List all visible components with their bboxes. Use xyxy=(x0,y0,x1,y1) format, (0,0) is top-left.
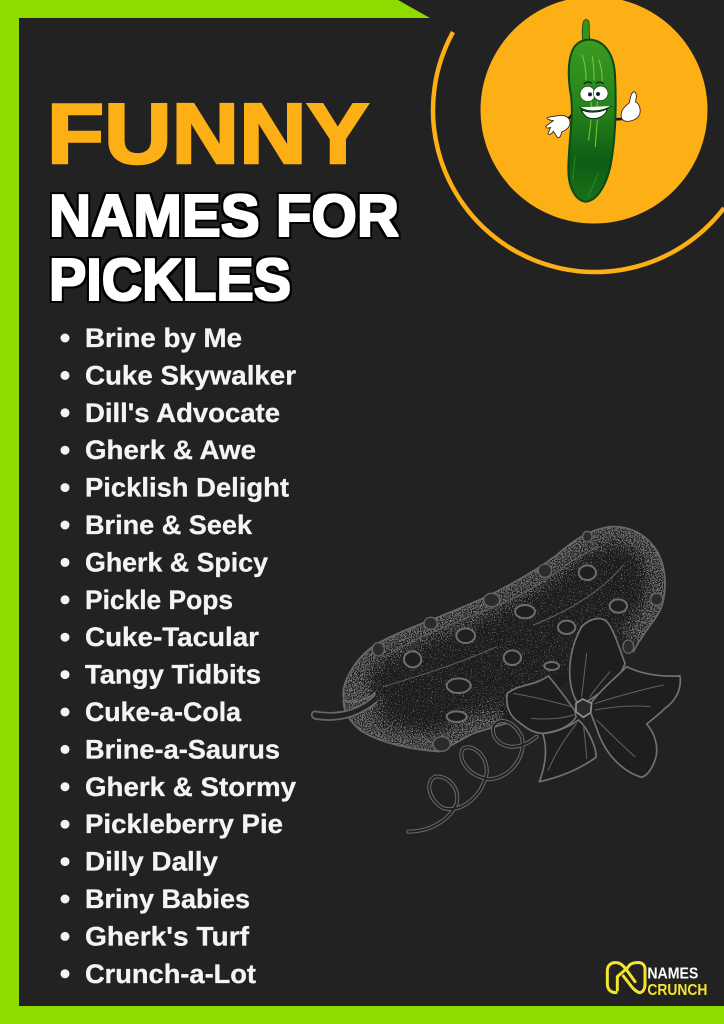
pickle stem tip xyxy=(312,695,377,720)
list item: Tangy Tidbits xyxy=(85,660,261,690)
pickle stripes xyxy=(573,55,602,197)
list item: Crunch-a-Lot xyxy=(85,959,256,989)
stippled pickle shading xyxy=(343,527,665,752)
pickle eyes xyxy=(580,82,608,102)
pickle stem xyxy=(582,19,590,41)
list item: Gherk & Spicy xyxy=(85,547,268,577)
illustration: faded pickle with flower and tendril xyxy=(312,527,680,832)
pickle warts xyxy=(372,531,663,751)
list item: Dill's Advocate xyxy=(85,398,280,428)
list item: Cuke-a-Cola xyxy=(85,697,242,727)
pickle arms xyxy=(567,115,625,121)
pickle body base xyxy=(343,527,665,752)
pickle body xyxy=(568,40,616,202)
pickle smile xyxy=(579,106,611,119)
bullet dots xyxy=(60,334,70,978)
heading line two: PICKLES xyxy=(49,247,291,313)
title: FUNNY: FUNNY xyxy=(47,87,369,182)
logo N mark xyxy=(607,963,645,993)
list item: Cuke-Tacular xyxy=(85,622,259,652)
logo: names crunch xyxy=(607,963,707,999)
logo word NAMES: NAMES xyxy=(647,966,699,983)
left glove xyxy=(546,115,570,138)
flower petals xyxy=(507,619,680,782)
list item: Picklish Delight xyxy=(85,473,289,503)
heading line one: NAMES FOR xyxy=(49,183,399,249)
list item: Gherk's Turf xyxy=(85,921,250,951)
tendril xyxy=(408,721,537,832)
list item: Gherk & Stormy xyxy=(85,772,296,802)
logo word CRUNCH: CRUNCH xyxy=(647,982,707,999)
pickle outline xyxy=(343,527,665,752)
flower centre xyxy=(576,699,592,717)
list item: Dilly Dally xyxy=(85,847,218,877)
right glove xyxy=(621,92,640,121)
list item: Brine-a-Saurus xyxy=(85,734,280,764)
list item: Brine & Seek xyxy=(85,510,253,540)
list item: Brine by Me xyxy=(85,323,242,353)
list item: Briny Babies xyxy=(85,884,250,914)
list item: Pickle Pops xyxy=(85,585,233,615)
flower veins xyxy=(513,653,663,770)
list item: Pickleberry Pie xyxy=(85,809,283,839)
list item: Gherk & Awe xyxy=(85,435,256,465)
icon: cartoon pickle mascot xyxy=(546,19,640,202)
orange ring arc xyxy=(433,32,724,272)
orange circle xyxy=(480,0,708,224)
list of funny pickle names xyxy=(60,323,297,989)
list item: Cuke Skywalker xyxy=(85,360,297,390)
pickle spots xyxy=(404,565,627,722)
heading: names for pickles xyxy=(49,183,399,313)
pickle ridge lines xyxy=(383,547,623,687)
